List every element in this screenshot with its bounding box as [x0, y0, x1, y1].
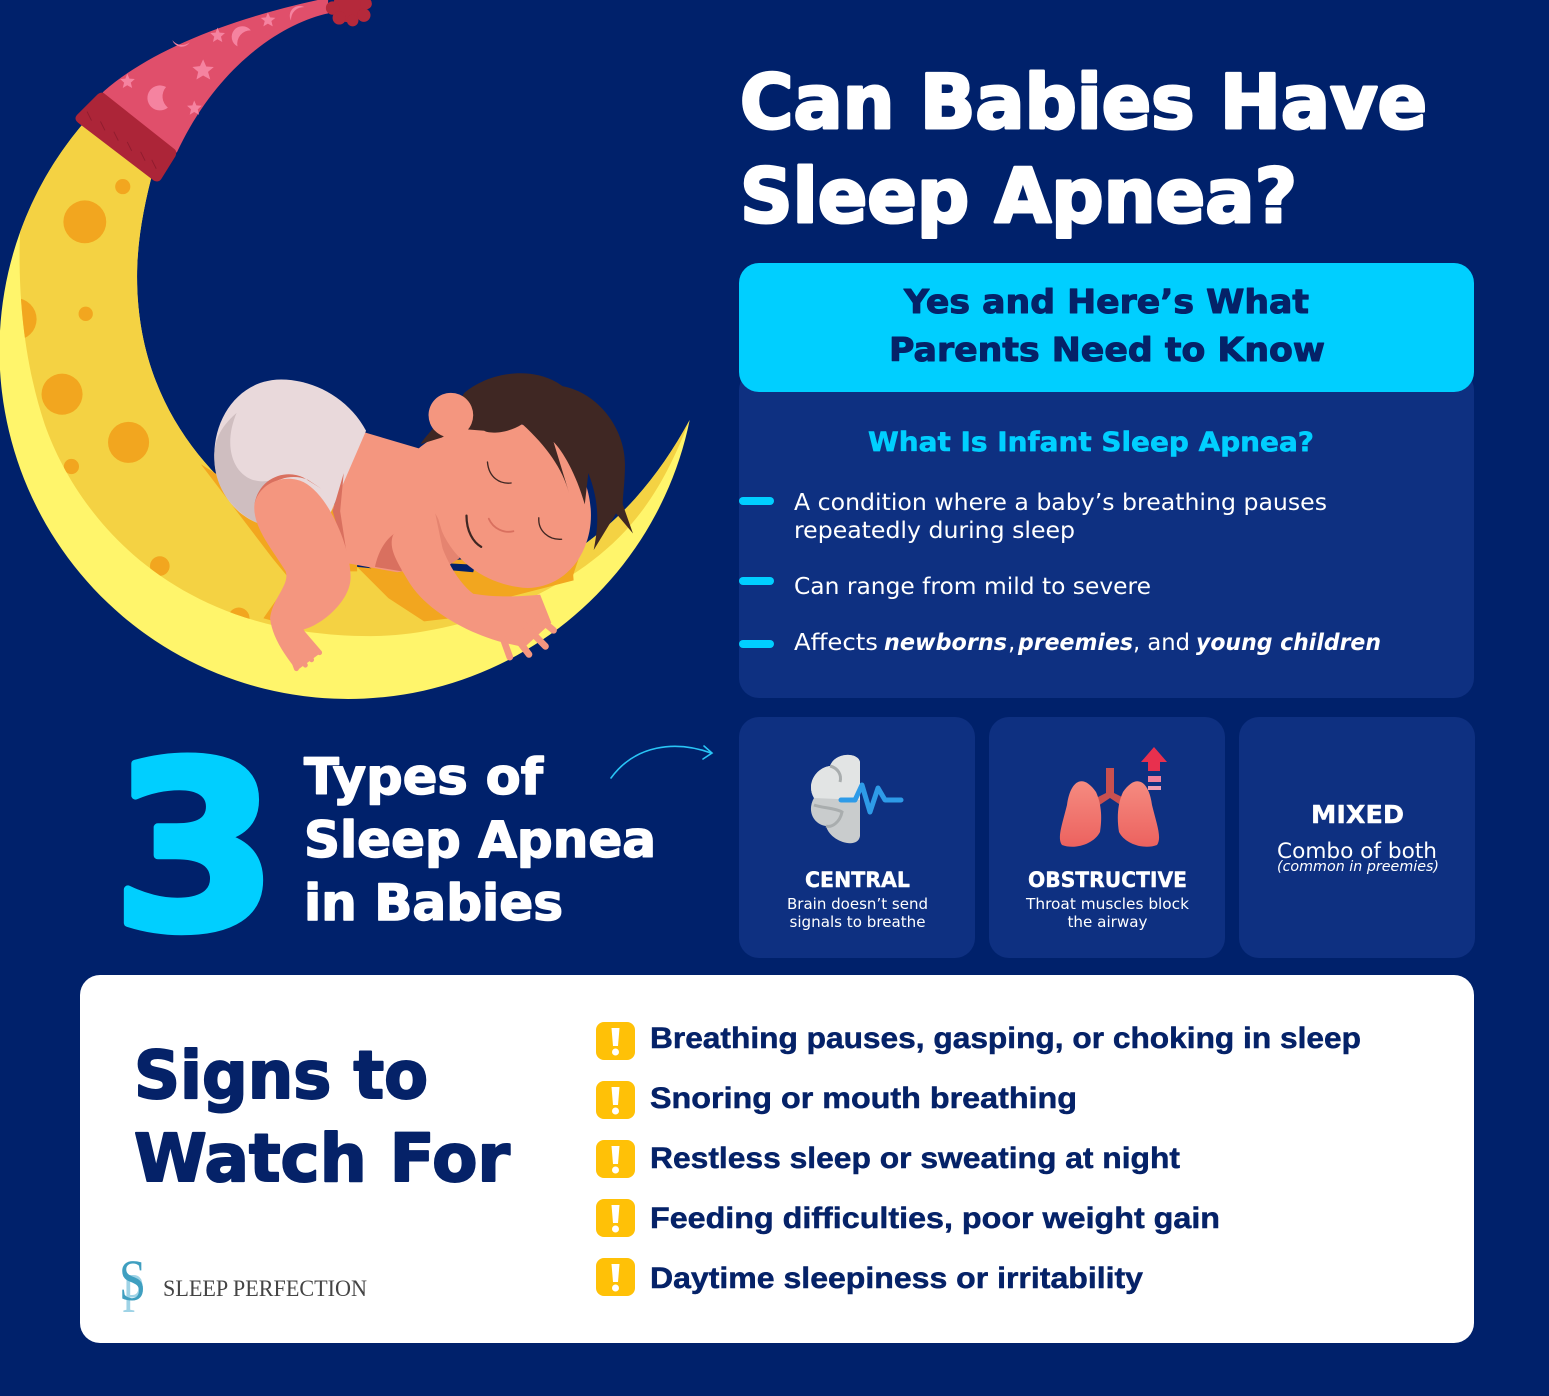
- panel heading banner: Yes and Here’s What: [903, 282, 1309, 321]
- title: [740, 58, 1427, 240]
- panel heading banner: [739, 263, 1474, 392]
- arrow: [611, 746, 712, 778]
- title: Sleep Apnea?: [740, 152, 1297, 240]
- bullet 3: [739, 630, 1381, 656]
- label: Combo of both: [1277, 839, 1437, 863]
- bullet 1: A condition where a baby’s breathing pauses: [794, 490, 1327, 516]
- sign 3: Restless sleep or sweating at night: [650, 1142, 1180, 1175]
- heading: Watch For: [134, 1120, 510, 1197]
- baby: [214, 373, 633, 670]
- bullet 3: ,: [1008, 630, 1015, 656]
- label: MIXED: [1311, 800, 1404, 829]
- label: (common in preemies): [1277, 859, 1439, 875]
- bullet 1: [739, 490, 1327, 544]
- sign 1: Breathing pauses, gasping, or choking in sleep: [650, 1022, 1361, 1055]
- label: CENTRAL: [805, 868, 910, 892]
- label: [1277, 800, 1439, 875]
- logo: [119, 1248, 367, 1325]
- title: Can Babies Have: [740, 58, 1427, 146]
- label: Throat muscles block: [1025, 895, 1189, 913]
- bullet 3: newborns: [884, 630, 1007, 656]
- panel: what is infant sleep apnea: [739, 263, 1474, 698]
- panel: central: [739, 717, 975, 958]
- label: OBSTRUCTIVE: [1028, 868, 1187, 892]
- panel: mixed: [1239, 717, 1475, 958]
- label: the airway: [1068, 913, 1148, 931]
- heading: types of sleep apnea: in Babies: [304, 874, 563, 932]
- bullet 1: repeatedly during sleep: [794, 518, 1075, 544]
- icon: lungs with up arrow: [1060, 747, 1167, 847]
- heading: types of sleep apnea: [304, 748, 656, 932]
- heading: types of sleep apnea: Types of: [304, 748, 544, 806]
- bullet 3: , and: [1133, 630, 1190, 656]
- label: signals to breathe: [790, 913, 926, 931]
- bullet 3: Affects: [794, 630, 878, 656]
- big number 3: 3: [112, 715, 278, 983]
- logo: SLEEP PERFECTION: [163, 1276, 367, 1301]
- panel heading banner: Parents Need to Know: [889, 330, 1325, 369]
- hat: [75, 0, 372, 182]
- subheading: What Is Infant Sleep Apnea?: [868, 427, 1314, 458]
- label: [1025, 868, 1189, 931]
- logo: P: [122, 1263, 144, 1325]
- icon: brain with pulse: [811, 755, 901, 843]
- bullet 2: Can range from mild to severe: [794, 574, 1151, 600]
- heading: Signs to: [134, 1037, 428, 1114]
- bullet 3: preemies: [1017, 630, 1133, 656]
- sign 2: Snoring or mouth breathing: [650, 1082, 1077, 1115]
- illustration: baby sleeping on crescent moon: [0, 0, 690, 699]
- heading: types of sleep apnea: Sleep Apnea: [304, 811, 656, 869]
- label: [787, 868, 928, 931]
- sign 5: Daytime sleepiness or irritability: [650, 1262, 1143, 1295]
- sign 4: Feeding difficulties, poor weight gain: [650, 1202, 1220, 1235]
- panel: obstructive: [989, 717, 1225, 958]
- label: Brain doesn’t send: [787, 895, 928, 913]
- heading: [134, 1037, 510, 1197]
- logo: S: [119, 1248, 146, 1313]
- moon: [0, 114, 690, 699]
- bullet 3: young children: [1196, 630, 1381, 656]
- panel: signs to watch for: [80, 975, 1474, 1343]
